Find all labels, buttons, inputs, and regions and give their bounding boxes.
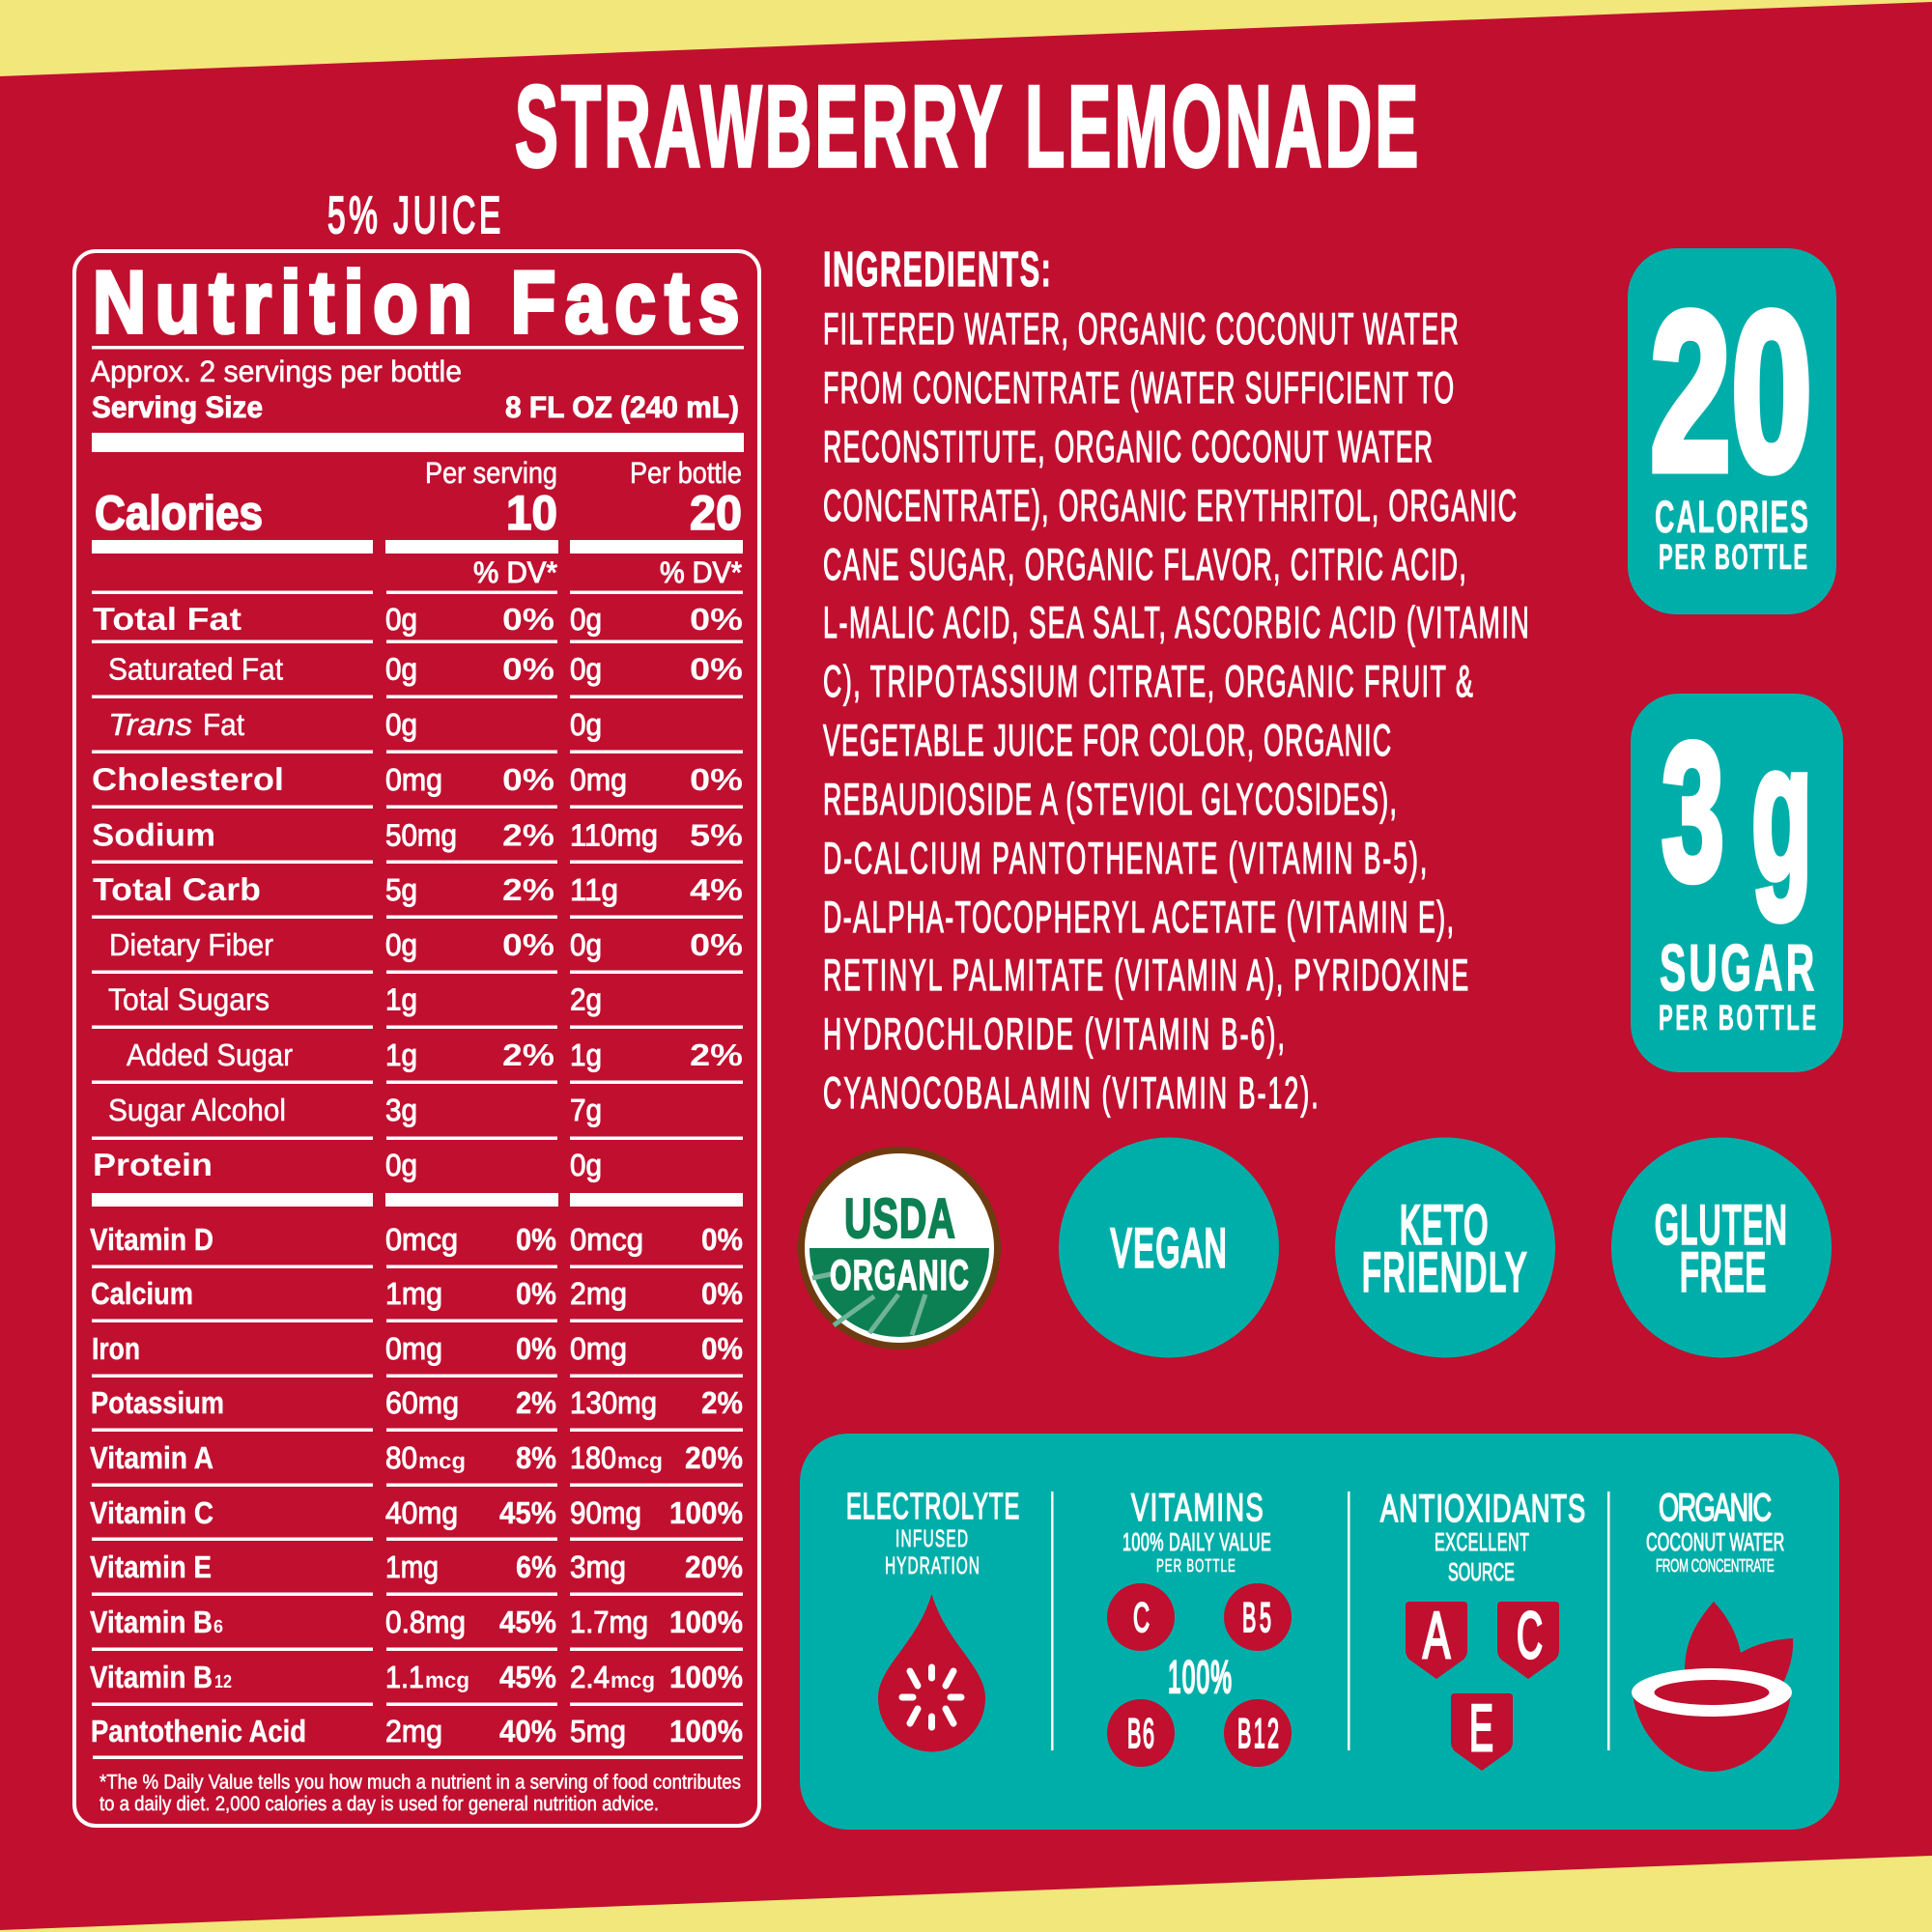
footnote: to a daily diet. 2,000 calories a day is used for general nutrition advice. xyxy=(99,1793,659,1815)
row: Vitamin B6: 100% xyxy=(669,1605,743,1639)
electrolyte column: HYDRATION xyxy=(885,1552,980,1579)
vitamins column xyxy=(1107,1487,1292,1767)
row: Vitamin A: 180 xyxy=(570,1440,616,1475)
ingredients text block: HYDROCHLORIDE (VITAMIN B-6), xyxy=(823,1009,1285,1059)
row: Sodium: Sodium xyxy=(92,817,215,852)
row: Vitamin C: 45% xyxy=(499,1495,556,1530)
row: Calcium: 0% xyxy=(516,1276,556,1311)
ingredients heading: INGREDIENTS: xyxy=(823,242,1051,297)
row: Vitamin C: Vitamin C xyxy=(90,1495,213,1530)
title: STRAWBERRY LEMONADE xyxy=(515,62,1418,191)
row: Total Carb: 4% xyxy=(690,872,743,907)
row: Sodium: 50mg xyxy=(385,817,457,852)
row: Vitamin E: 3mg xyxy=(570,1549,626,1584)
ingredients text block: C), TRIPOTASSIUM CITRATE, ORGANIC FRUIT & xyxy=(823,656,1473,706)
column headings xyxy=(425,456,742,490)
row: Vitamin B12: 2.4 xyxy=(570,1660,610,1694)
antioxidants column: ANTIOXIDANTS xyxy=(1380,1488,1585,1530)
row: Added Sugar xyxy=(127,1037,743,1072)
icon: vitamin B6 xyxy=(1107,1699,1175,1767)
row: Potassium: 2% xyxy=(516,1385,556,1420)
column headings: Per serving xyxy=(425,456,557,490)
row: Vitamin B12: 100% xyxy=(669,1660,743,1694)
row: Pantothenic Acid: 100% xyxy=(669,1714,743,1748)
row: Saturated Fat: 0% xyxy=(690,651,743,686)
row: Vitamin C: 100% xyxy=(669,1495,743,1530)
row: Pantothenic Acid: 5mg xyxy=(570,1714,626,1748)
row: Vitamin A: mcg xyxy=(617,1448,663,1473)
row: Vitamin E xyxy=(90,1549,743,1584)
footnote: *The % Daily Value tells you how much a nutrient in a serving of food contributes xyxy=(99,1772,741,1793)
row: Pantothenic Acid: 40% xyxy=(499,1714,556,1748)
electrolyte column xyxy=(846,1487,1019,1751)
row: Total Carb: 2% xyxy=(502,872,554,907)
ingredients text block: L-MALIC ACID, SEA SALT, ASCORBIC ACID (VITAMIN xyxy=(823,597,1529,647)
callout: 3g sugar per bottle: g xyxy=(1751,702,1812,921)
ingredients text block: D-ALPHA-TOCOPHERYL ACETATE (VITAMIN E), xyxy=(823,892,1454,942)
row: Protein: Protein xyxy=(93,1147,213,1182)
row: Protein: 0g xyxy=(385,1148,417,1182)
row: Iron: 0% xyxy=(516,1331,556,1366)
ingredients text block: RETINYL PALMITATE (VITAMIN A), PYRIDOXINE xyxy=(823,950,1468,1000)
percent daily value headings xyxy=(473,555,742,589)
row: Saturated Fat: Saturated Fat xyxy=(108,651,283,686)
ingredients text block xyxy=(823,242,1529,1118)
row: Dietary Fiber: 0% xyxy=(690,927,743,962)
ingredients text block: FILTERED WATER, ORGANIC COCONUT WATER xyxy=(823,303,1459,354)
row: Vitamin B12 xyxy=(90,1660,743,1694)
badge: gluten free: GLUTEN xyxy=(1655,1194,1787,1255)
row: Vitamin B12: mcg xyxy=(611,1667,655,1692)
row: Total Carb: 5g xyxy=(385,872,417,907)
electrolyte column: ELECTROLYTE xyxy=(846,1487,1019,1527)
badge: USDA organic xyxy=(798,1147,1001,1350)
ingredients text block: CYANOCOBALAMIN (VITAMIN B-12). xyxy=(823,1067,1319,1118)
row: Calcium: 0% xyxy=(701,1276,743,1311)
row: Dietary Fiber: 0g xyxy=(385,927,417,962)
row: Vitamin E: Vitamin E xyxy=(90,1549,212,1584)
row: Iron xyxy=(92,1331,743,1366)
vitamins column: VITAMINS xyxy=(1131,1487,1264,1529)
row: Iron: 0mg xyxy=(570,1331,627,1366)
ingredients text block: CANE SUGAR, ORGANIC FLAVOR, CITRIC ACID, xyxy=(823,539,1466,589)
row: Calcium: 2mg xyxy=(570,1276,627,1311)
icon: vitamin B5: B5 xyxy=(1242,1595,1271,1641)
row: Added Sugar: Added Sugar xyxy=(127,1037,293,1072)
organic coconut water column: ORGANIC xyxy=(1659,1487,1772,1529)
callout: 3g sugar per bottle: 3 xyxy=(1662,702,1724,921)
antioxidants column: SOURCE xyxy=(1448,1557,1515,1586)
row: Iron: Iron xyxy=(92,1331,140,1366)
icon: shield A: A xyxy=(1423,1599,1451,1672)
row: Dietary Fiber: 0g xyxy=(570,927,602,962)
row: Sodium: 2% xyxy=(502,817,554,852)
row: Dietary Fiber: Dietary Fiber xyxy=(109,927,273,962)
row: Vitamin D: 0% xyxy=(701,1222,743,1257)
serving size: 8 FL OZ (240 mL) xyxy=(505,390,739,424)
ingredients text block: FROM CONCENTRATE (WATER SUFFICIENT TO xyxy=(823,362,1454,412)
icon: coconut xyxy=(1632,1602,1793,1772)
row: Vitamin E: 6% xyxy=(516,1549,556,1584)
row: Sodium: 5% xyxy=(690,817,743,852)
electrolyte column: INFUSED xyxy=(895,1525,968,1552)
percent daily value headings: % DV* xyxy=(660,555,742,589)
ingredients text block: RECONSTITUTE, ORGANIC COCONUT WATER xyxy=(823,421,1433,471)
row: Vitamin B6: 6 xyxy=(213,1617,223,1637)
row: Total Carb: 11g xyxy=(570,872,618,907)
icon: vitamin C xyxy=(1107,1583,1175,1651)
row: Vitamin B6: 1.7mg xyxy=(570,1605,648,1639)
row: Saturated Fat xyxy=(108,651,743,686)
row: Cholesterol: 0% xyxy=(690,762,743,797)
organic coconut water column xyxy=(1632,1487,1793,1772)
badge: gluten free xyxy=(1611,1138,1832,1358)
badge: gluten free: FREE xyxy=(1680,1241,1766,1302)
row: Vitamin A xyxy=(90,1440,743,1475)
icon: vitamin B5 xyxy=(1224,1583,1292,1651)
row: Vitamin A: mcg xyxy=(418,1448,466,1473)
row: Potassium: 130mg xyxy=(570,1385,657,1420)
row: Vitamin E: 20% xyxy=(685,1549,743,1584)
row: Vitamin B6 xyxy=(90,1605,743,1639)
servings per bottle: Approx. 2 servings per bottle xyxy=(91,355,462,388)
row: Total Fat: 0g xyxy=(570,602,602,637)
nutrition facts heading: Nutrition Facts xyxy=(93,254,739,352)
row: Cholesterol: 0mg xyxy=(570,762,627,797)
panel: benefits xyxy=(800,1434,1839,1830)
row: Trans Fat xyxy=(108,707,602,742)
row: Vitamin C xyxy=(90,1495,743,1530)
row: Calcium: 1mg xyxy=(385,1276,442,1311)
row: Sodium xyxy=(92,817,743,852)
row: Added Sugar: 2% xyxy=(502,1037,554,1072)
row: Total Fat: 0% xyxy=(690,602,743,637)
callout: 3g sugar per bottle xyxy=(1631,694,1843,1072)
row: Dietary Fiber: 0% xyxy=(502,927,554,962)
row: Pantothenic Acid: 2mg xyxy=(385,1714,442,1748)
icon: water drop xyxy=(878,1594,985,1751)
row: Total Sugars: Total Sugars xyxy=(108,981,270,1016)
serving size xyxy=(92,390,739,424)
icon: vitamin C: C xyxy=(1133,1595,1150,1641)
row: Saturated Fat: 0g xyxy=(570,651,602,686)
icon: shield A xyxy=(1406,1599,1467,1679)
row: Total Sugars xyxy=(108,981,602,1016)
row: Vitamin B12: 12 xyxy=(214,1672,232,1692)
row: Pantothenic Acid: Pantothenic Acid xyxy=(91,1714,306,1748)
footnote xyxy=(99,1772,741,1815)
row: Trans Fat: 0g xyxy=(385,707,417,742)
row: Cholesterol xyxy=(92,761,743,797)
row: Sodium: 110mg xyxy=(570,817,658,852)
icon: vitamin B12 xyxy=(1224,1699,1292,1767)
calories row: 10 xyxy=(506,486,557,540)
row: Dietary Fiber xyxy=(109,927,743,962)
badge: keto friendly: FRIENDLY xyxy=(1362,1241,1526,1302)
row: Vitamin A: 80 xyxy=(385,1440,417,1475)
row: Potassium: 2% xyxy=(701,1385,743,1420)
icon: shield E xyxy=(1451,1691,1513,1771)
row: Vitamin A: 8% xyxy=(516,1440,556,1475)
row: Vitamin B6: 45% xyxy=(499,1605,556,1639)
callout: 20 calories per bottle: PER BOTTLE xyxy=(1659,537,1807,577)
icon: shield C: C xyxy=(1517,1599,1543,1672)
row: Total Fat: 0% xyxy=(502,602,554,637)
row: Trans Fat: Fat xyxy=(203,707,244,742)
row: Sugar Alcohol xyxy=(108,1093,602,1127)
row: Cholesterol: Cholesterol xyxy=(92,761,284,797)
100 percent label: 100% xyxy=(1168,1651,1232,1702)
row: Protein: 0g xyxy=(570,1148,602,1182)
calories row: Calories xyxy=(95,486,263,540)
row: Vitamin C: 40mg xyxy=(385,1495,458,1530)
row: Sugar Alcohol: Sugar Alcohol xyxy=(108,1093,286,1127)
row: Total Fat: 0g xyxy=(385,602,417,637)
row: Vitamin B12: Vitamin B xyxy=(90,1660,213,1694)
callout: 3g sugar per bottle: SUGAR xyxy=(1660,931,1814,1005)
row: Added Sugar: 2% xyxy=(690,1037,743,1072)
row: Added Sugar: 1g xyxy=(570,1037,602,1072)
row: Iron: 0% xyxy=(701,1331,743,1366)
row: Calcium: Calcium xyxy=(91,1276,193,1311)
row: Total Sugars: 2g xyxy=(570,981,602,1016)
row: Potassium: Potassium xyxy=(91,1385,224,1420)
row: Trans Fat: 0g xyxy=(570,707,602,742)
row: Vitamin B12: 1.1 xyxy=(385,1660,424,1694)
badge: USDA organic: USDA xyxy=(844,1187,955,1250)
row: Iron: 0mg xyxy=(385,1331,442,1366)
row: Total Fat: Total Fat xyxy=(93,601,242,637)
organic coconut water column: COCONUT WATER xyxy=(1646,1527,1784,1556)
calories row: 20 xyxy=(690,486,742,540)
badge: vegan xyxy=(1059,1138,1279,1358)
icon: shield C xyxy=(1497,1599,1559,1679)
row: Vitamin C: 90mg xyxy=(570,1495,641,1530)
callout: 20 calories per bottle: CALORIES xyxy=(1655,491,1808,542)
badge: keto friendly xyxy=(1335,1138,1555,1358)
juice percentage label: 5% JUICE xyxy=(327,186,500,244)
row: Vitamin A: Vitamin A xyxy=(90,1440,213,1475)
icon: vitamin B12: B12 xyxy=(1237,1711,1279,1757)
badge: vegan: VEGAN xyxy=(1111,1217,1227,1278)
row: Vitamin A: 20% xyxy=(685,1440,743,1475)
vitamins column: 100% DAILY VALUE xyxy=(1122,1527,1271,1556)
row: Total Carb: Total Carb xyxy=(93,871,261,907)
row: Saturated Fat: 0g xyxy=(385,651,417,686)
row: Calcium xyxy=(91,1276,743,1311)
row: Vitamin D: 0mcg xyxy=(385,1222,458,1257)
badge: USDA organic: ORGANIC xyxy=(830,1252,969,1299)
ingredients text block: REBAUDIOSIDE A (STEVIOL GLYCOSIDES), xyxy=(823,774,1397,824)
row: Vitamin E: 1mg xyxy=(385,1549,439,1584)
calories row xyxy=(95,486,742,540)
callout: 20 calories per bottle xyxy=(1628,248,1836,614)
row: Pantothenic Acid xyxy=(91,1714,743,1748)
row: Vitamin D: 0mcg xyxy=(570,1222,643,1257)
column headings: Per bottle xyxy=(630,456,742,490)
ingredients text block: VEGETABLE JUICE FOR COLOR, ORGANIC xyxy=(823,715,1391,765)
antioxidants column xyxy=(1380,1488,1585,1771)
row: Total Sugars: 1g xyxy=(385,981,417,1016)
row: Total Carb xyxy=(93,871,743,907)
row: Sugar Alcohol: 3g xyxy=(385,1093,417,1127)
callout: 20 calories per bottle: 20 xyxy=(1650,265,1812,518)
row: Cholesterol: 0% xyxy=(502,762,554,797)
row: Potassium xyxy=(91,1385,743,1420)
row: Vitamin B12: 45% xyxy=(499,1660,556,1694)
row: Total Fat xyxy=(93,601,743,637)
row: Potassium: 60mg xyxy=(385,1385,459,1420)
row: Protein xyxy=(93,1147,602,1182)
ingredients text block: CONCENTRATE), ORGANIC ERYTHRITOL, ORGANIC xyxy=(823,480,1517,530)
row: Vitamin B6: 0.8mg xyxy=(385,1605,466,1639)
row: Added Sugar: 1g xyxy=(385,1037,417,1072)
row: Vitamin B12: mcg xyxy=(425,1667,469,1692)
row: Vitamin D xyxy=(90,1222,743,1257)
panel: nutrition facts xyxy=(74,251,759,1826)
vitamins column: PER BOTTLE xyxy=(1156,1556,1236,1577)
antioxidants column: EXCELLENT xyxy=(1435,1527,1529,1556)
row: Trans Fat: Trans xyxy=(108,707,192,742)
serving size: Serving Size xyxy=(92,390,263,424)
row: Vitamin B6: Vitamin B xyxy=(90,1605,213,1639)
badge: keto friendly: KETO xyxy=(1400,1194,1488,1255)
percent daily value headings: % DV* xyxy=(473,555,557,589)
ingredients text block: D-CALCIUM PANTOTHENATE (VITAMIN B-5), xyxy=(823,833,1427,883)
row: Sugar Alcohol: 7g xyxy=(570,1093,602,1127)
row: Saturated Fat: 0% xyxy=(502,651,554,686)
row: Vitamin D: 0% xyxy=(516,1222,556,1257)
row: Cholesterol: 0mg xyxy=(385,762,442,797)
icon: shield E: E xyxy=(1469,1691,1493,1765)
callout: 3g sugar per bottle: PER BOTTLE xyxy=(1659,998,1816,1037)
row: Vitamin D: Vitamin D xyxy=(90,1222,213,1257)
organic coconut water column: FROM CONCENTRATE xyxy=(1656,1556,1775,1577)
icon: vitamin B6: B6 xyxy=(1127,1711,1154,1757)
